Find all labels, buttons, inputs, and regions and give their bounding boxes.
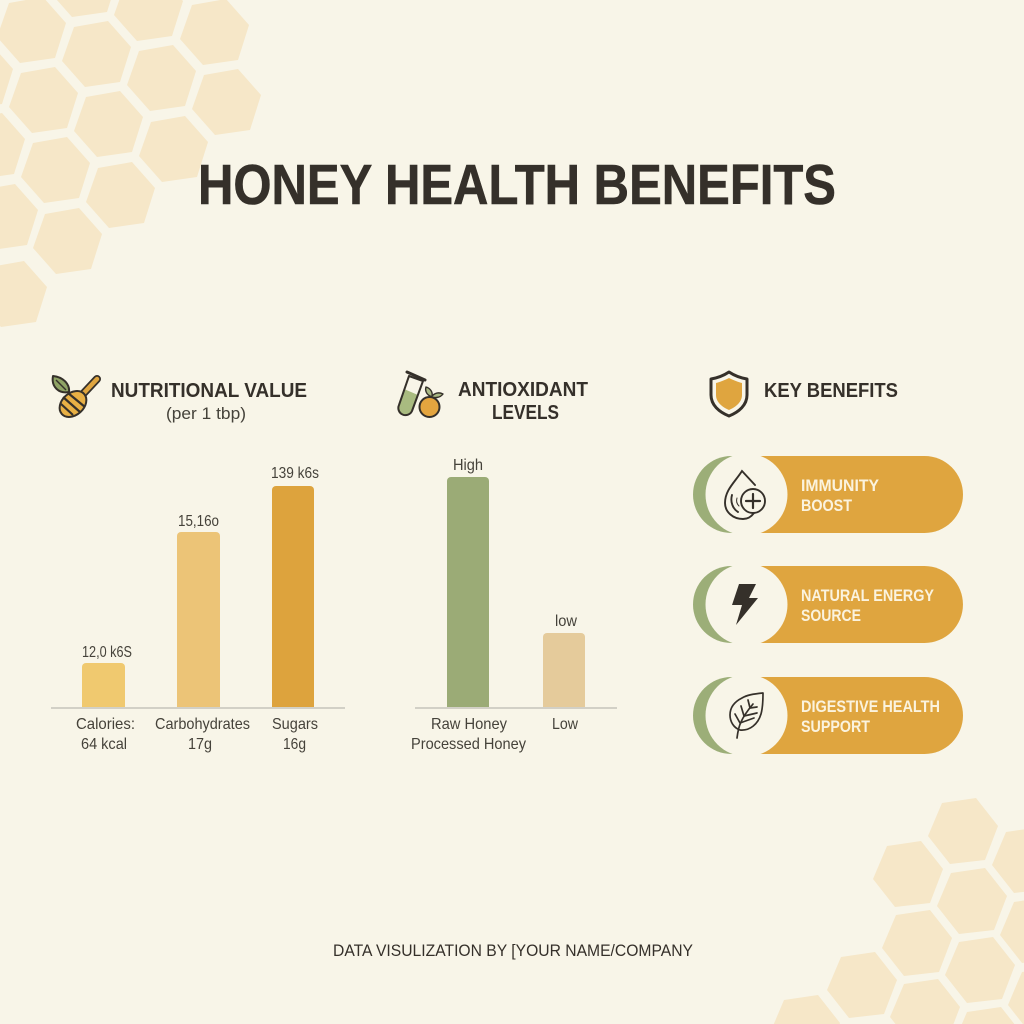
icon: test tube and orange xyxy=(398,372,443,417)
label: natural energy source: NATURAL ENERGY xyxy=(801,586,935,605)
subheading: per 1 tbp: (per 1 tbp) xyxy=(166,404,246,423)
category label: low: Low xyxy=(552,716,578,733)
heading: nutritional value: NUTRITIONAL VALUE xyxy=(111,379,307,402)
label: digestive health support: DIGESTIVE HEALTH xyxy=(801,697,940,716)
bar chart: nutrition xyxy=(51,465,345,753)
label: digestive health support: SUPPORT xyxy=(801,717,871,736)
title: HONEY HEALTH BENEFITS xyxy=(198,153,836,217)
label: digestive health support xyxy=(801,697,940,736)
category label: sugars: Sugars xyxy=(272,716,318,733)
label: immunity boost xyxy=(801,476,880,515)
bar: carbohydrates xyxy=(177,532,220,708)
category label: processed honey: Processed Honey xyxy=(411,736,526,753)
heading: key benefits: KEY BENEFITS xyxy=(764,379,898,402)
label: natural energy source xyxy=(801,586,935,625)
benefit: immunity boost xyxy=(693,454,963,536)
value label: sugars: 139 k6s xyxy=(271,465,319,482)
bar: processed honey xyxy=(543,633,585,708)
icon: leaf xyxy=(730,693,763,738)
category value: sugars: 16g xyxy=(283,736,306,753)
benefit: natural energy source xyxy=(693,564,963,646)
icon: honey dipper with leaf xyxy=(53,376,97,422)
category label: calories: Calories: xyxy=(76,716,135,733)
panel: antioxidant levels xyxy=(398,372,617,753)
heading: antioxidant levels: LEVELS xyxy=(492,401,559,424)
icon: drop with plus xyxy=(725,471,765,519)
value label: high: High xyxy=(453,457,483,474)
heading: antioxidant levels xyxy=(458,378,588,424)
category label: carbohydrates: Carbohydrates xyxy=(155,716,250,733)
value label: calories: 12,0 k6S xyxy=(82,644,132,661)
honeycomb: top-left corner xyxy=(0,0,261,327)
bar chart: antioxidants xyxy=(411,457,617,753)
bar: sugars xyxy=(272,486,314,708)
heading: antioxidant levels: ANTIOXIDANT xyxy=(458,378,588,401)
footer credit: DATA VISULIZATION BY [YOUR NAME/COMPANY xyxy=(333,941,693,960)
value label: low: low xyxy=(555,613,577,630)
bar: calories xyxy=(82,663,125,708)
label: immunity boost: BOOST xyxy=(801,496,853,515)
panel: key benefits xyxy=(693,372,963,756)
icon: shield xyxy=(711,372,747,416)
panel: nutritional value xyxy=(51,376,345,753)
category value: carbohydrates: 17g xyxy=(188,736,212,753)
bar: raw honey xyxy=(447,477,489,708)
benefit: digestive health support xyxy=(693,674,963,756)
category label: raw honey: Raw Honey xyxy=(431,716,507,733)
label: immunity boost: IMMUNITY xyxy=(801,476,880,495)
value label: carbohydrates: 15,16o xyxy=(178,513,219,530)
label: natural energy source: SOURCE xyxy=(801,606,861,625)
category value: calories: 64 kcal xyxy=(81,736,127,753)
honeycomb: bottom-right corner xyxy=(770,798,1024,1024)
icon: lightning bolt xyxy=(732,584,758,625)
